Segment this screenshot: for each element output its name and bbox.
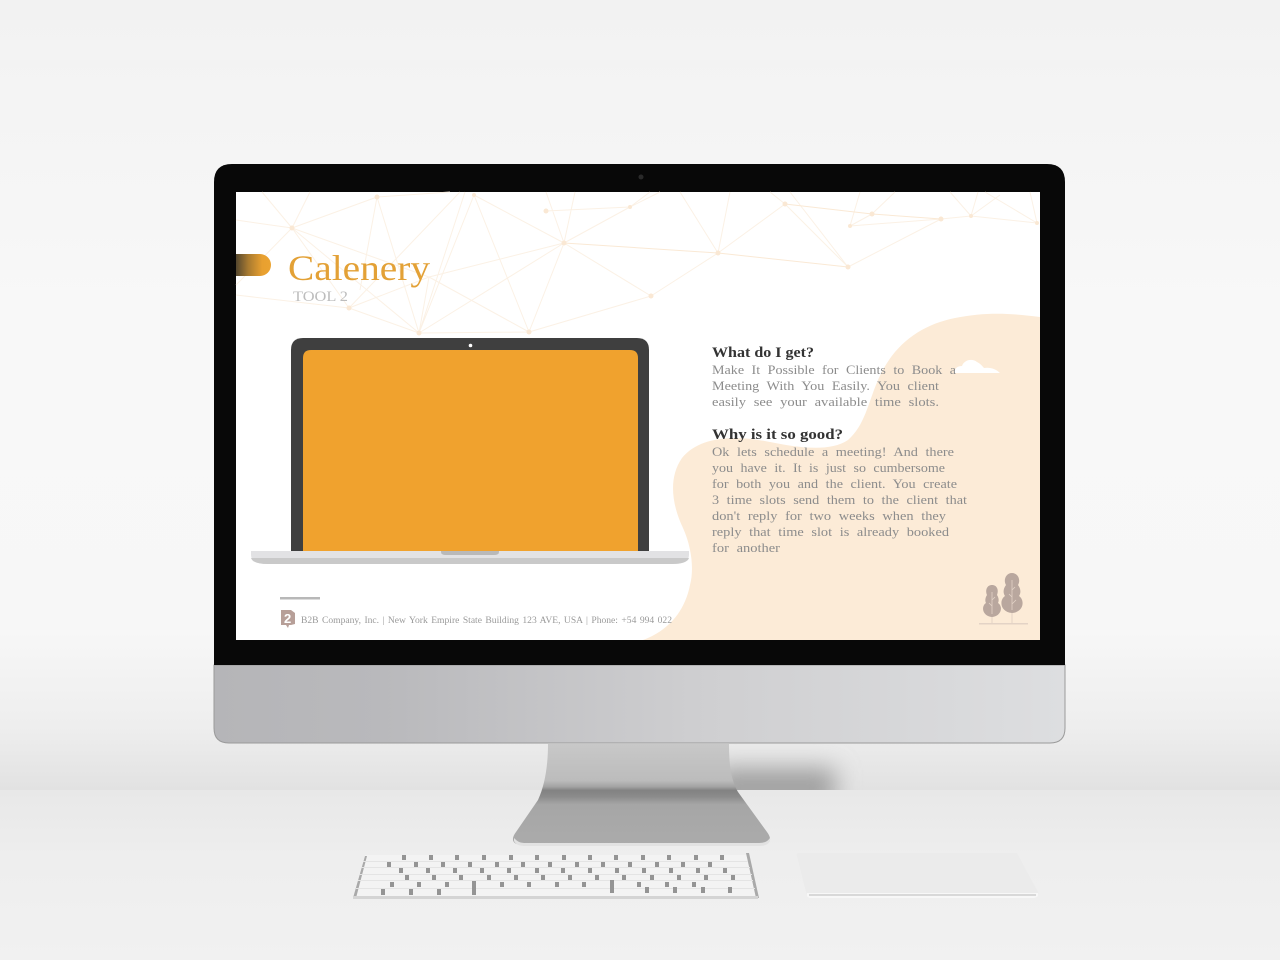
laptop notch [441,551,499,555]
text block: why is it so good: for both you and the client. You create [712,477,958,491]
text block: why is it so good: Why is it so good? [712,427,843,443]
monitor chin [214,665,1065,743]
text block: what do I get: easily see your available time slots. [712,395,939,409]
text block: what do I get [712,345,957,409]
footer rule [280,597,320,600]
peach blob background [643,314,1040,640]
text block: why is it so good: reply that time slot is already booked [712,525,950,539]
monitor [214,164,1065,743]
keyboard keys [381,855,735,895]
network nodes [290,193,1039,336]
text block: what do I get: Meeting With You Easily. You client [712,379,940,393]
laptop camera [469,344,472,347]
laptop base shadow [251,558,689,564]
text block: why is it so good: Ok lets schedule a meeting! And there [712,445,955,459]
laptop screen [303,350,638,551]
title: Calenery [288,248,430,288]
text block: what do I get: Make It Possible for Clients to Book a [712,363,957,377]
stand shadow [730,754,848,790]
text block: why is it so good: don't reply for two weeks when they [712,509,947,523]
icon: cloud [955,360,1000,373]
trackpad [797,853,1038,898]
subtitle: TOOL 2 [293,289,348,305]
webcam [638,174,644,180]
icon: trees [979,573,1028,624]
footer logo [281,610,295,628]
text block: why is it so good: for another [712,541,781,555]
title accent pill [236,254,271,276]
laptop base [251,551,689,564]
desk surface [0,790,1280,960]
network pattern [236,192,1037,333]
monitor bezel [214,164,1065,665]
text block: why is it so good: you have it. It is just so cumbersome [712,461,946,475]
monitor stand [513,744,770,846]
keyboard [353,853,759,899]
text block: why is it so good [712,427,968,555]
text block: why is it so good: 3 time slots send them to the client that [712,493,968,507]
laptop illustration [251,338,689,564]
slide screen [236,192,1040,640]
text block: what do I get: What do I get? [712,345,814,361]
footer text: B2B Company, Inc. | New York Empire State Building 123 AVE, USA | Phone: +54 994 022 [301,615,672,625]
laptop lid [291,338,649,551]
footer logo: 2 [284,611,291,626]
